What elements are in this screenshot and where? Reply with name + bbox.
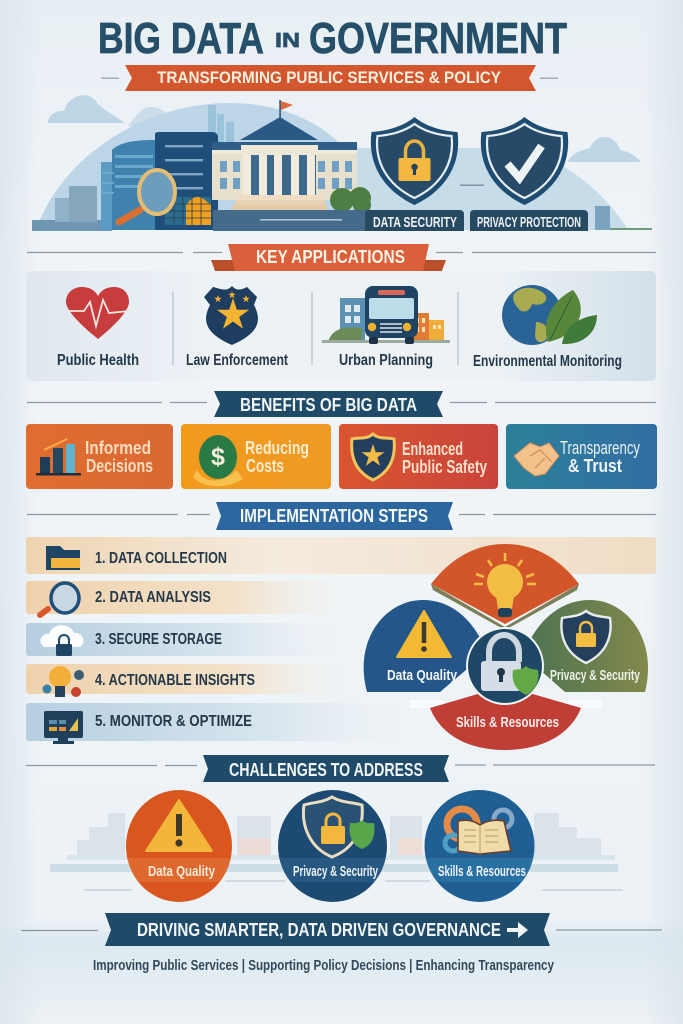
data tower: [155, 132, 218, 230]
segment: data quality: [364, 600, 481, 692]
label: environmental monitoring: Environmental Monitoring: [473, 353, 622, 370]
challenge: privacy and security: [278, 790, 388, 902]
step 2: data analysis: [26, 581, 371, 615]
title: IN: [275, 30, 300, 52]
label: data security: DATA SECURITY: [373, 215, 457, 231]
card: transparency and trust: & Trust: [568, 456, 622, 476]
icon: bulb and gears: [42, 666, 84, 697]
heading: implementation steps: [27, 502, 656, 530]
center lock: [466, 627, 544, 705]
segment: insights: [431, 544, 579, 630]
step 4: actionable insights: 4. ACTIONABLE INSIGHTS: [95, 672, 255, 689]
title: GOVERNMENT: [309, 14, 567, 63]
heading: challenges to address: [26, 755, 655, 782]
card: transparency and trust: [506, 424, 657, 489]
card: enhanced public safety: Public Safety: [402, 457, 487, 477]
card: reducing costs: Costs: [246, 456, 284, 476]
icon: data security shield: [371, 117, 458, 205]
segment: skills and resources: [430, 686, 581, 750]
icon: bus and city: [322, 286, 450, 344]
card: reducing costs: [181, 424, 331, 489]
title: [98, 14, 567, 63]
hero illustration: government skyline: [32, 95, 652, 231]
bushes: [330, 187, 371, 214]
heading: challenges to address: CHALLENGES TO ADDRESS: [229, 760, 423, 780]
challenge: skills and resources: Skills & Resources: [438, 863, 526, 880]
card: informed decisions: Decisions: [86, 456, 153, 476]
step 3: secure storage: 3. SECURE STORAGE: [95, 631, 222, 648]
label: data security: [365, 210, 464, 231]
icon: police badge: [204, 286, 258, 345]
subtitle ribbon: TRANSFORMING PUBLIC SERVICES & POLICY: [157, 68, 502, 87]
heading: benefits of big data: BENEFITS OF BIG DATA: [240, 395, 417, 415]
label: public health: Public Health: [57, 352, 139, 369]
card: enhanced public safety: [339, 424, 498, 489]
step 5: monitor and optimize: 5. MONITOR & OPTIMIZE: [95, 713, 252, 730]
icon: rising bars: [36, 439, 81, 476]
icon: globe and leaves: [502, 285, 597, 345]
subtitle ribbon: [101, 65, 558, 91]
footer tagline: Improving Public Services | Supporting Policy Decisions | Enhancing Transparency: [93, 957, 555, 974]
challenge: data quality: Data Quality: [148, 863, 215, 880]
heading: key applications: [27, 244, 656, 276]
magnifier: [119, 170, 175, 222]
icon: cloud lock: [40, 625, 84, 656]
challenge: skills and resources: [424, 790, 535, 902]
white band behind wheel: [410, 700, 602, 708]
segment: skills and resources: Skills & Resources: [456, 715, 559, 731]
step 4: actionable insights: [26, 664, 371, 697]
arrow: [507, 922, 528, 938]
icon: star shield: [352, 434, 394, 480]
faded skyline backdrop: [50, 813, 623, 890]
domes: [36, 103, 345, 230]
heading: benefits of big data: [27, 391, 656, 417]
icon: privacy protection shield: [481, 117, 568, 205]
panel: key applications: [26, 271, 656, 381]
step 1: data collection: [26, 537, 656, 574]
step 3: secure storage: [26, 623, 371, 656]
step 2: data analysis: 2. DATA ANALYSIS: [95, 589, 211, 606]
heading: key applications: KEY APPLICATIONS: [256, 247, 405, 267]
segment: privacy and security: Privacy & Security: [550, 668, 640, 684]
card: enhanced public safety: Enhanced: [402, 439, 463, 459]
label: urban planning: Urban Planning: [339, 352, 433, 369]
closing banner: DRIVING SMARTER, DATA DRIVEN GOVERNANCE: [137, 920, 501, 940]
challenge: data quality: [126, 790, 232, 902]
government building: [212, 100, 357, 210]
icon: monitor: [44, 711, 83, 744]
challenge: privacy and security: Privacy & Security: [293, 863, 378, 880]
plaza: [213, 210, 373, 231]
card: transparency and trust: Transparency: [560, 438, 640, 458]
closing banner: [21, 913, 662, 946]
label: privacy protection: PRIVACY PROTECTION: [477, 215, 581, 231]
label: privacy protection: [470, 210, 588, 231]
card: informed decisions: [26, 424, 173, 489]
card: reducing costs: Reducing: [245, 438, 309, 458]
step 5: monitor and optimize: [26, 703, 441, 744]
right ground: [595, 206, 610, 230]
distant towers: [208, 105, 234, 146]
icon: heart: [66, 287, 129, 339]
icon: dollar coin: [193, 435, 243, 486]
card: informed decisions: Informed: [85, 438, 151, 458]
icon: dollar coin: $: [211, 443, 225, 471]
icon: magnifier: [40, 583, 79, 615]
icon: folder: [46, 546, 80, 570]
clouds: [48, 95, 641, 162]
diagram: challenges wheel: [364, 544, 648, 750]
heading: implementation steps: IMPLEMENTATION STEPS: [240, 506, 428, 526]
step 1: data collection: 1. DATA COLLECTION: [95, 550, 227, 567]
segment: privacy and security: [530, 600, 648, 692]
data grid building: [165, 197, 211, 225]
title: BIG DATA: [98, 14, 264, 63]
icon: handshake: [514, 443, 559, 476]
segment: data quality: Data Quality: [387, 668, 457, 684]
label: law enforcement: Law Enforcement: [186, 352, 289, 369]
left buildings: [32, 220, 112, 231]
